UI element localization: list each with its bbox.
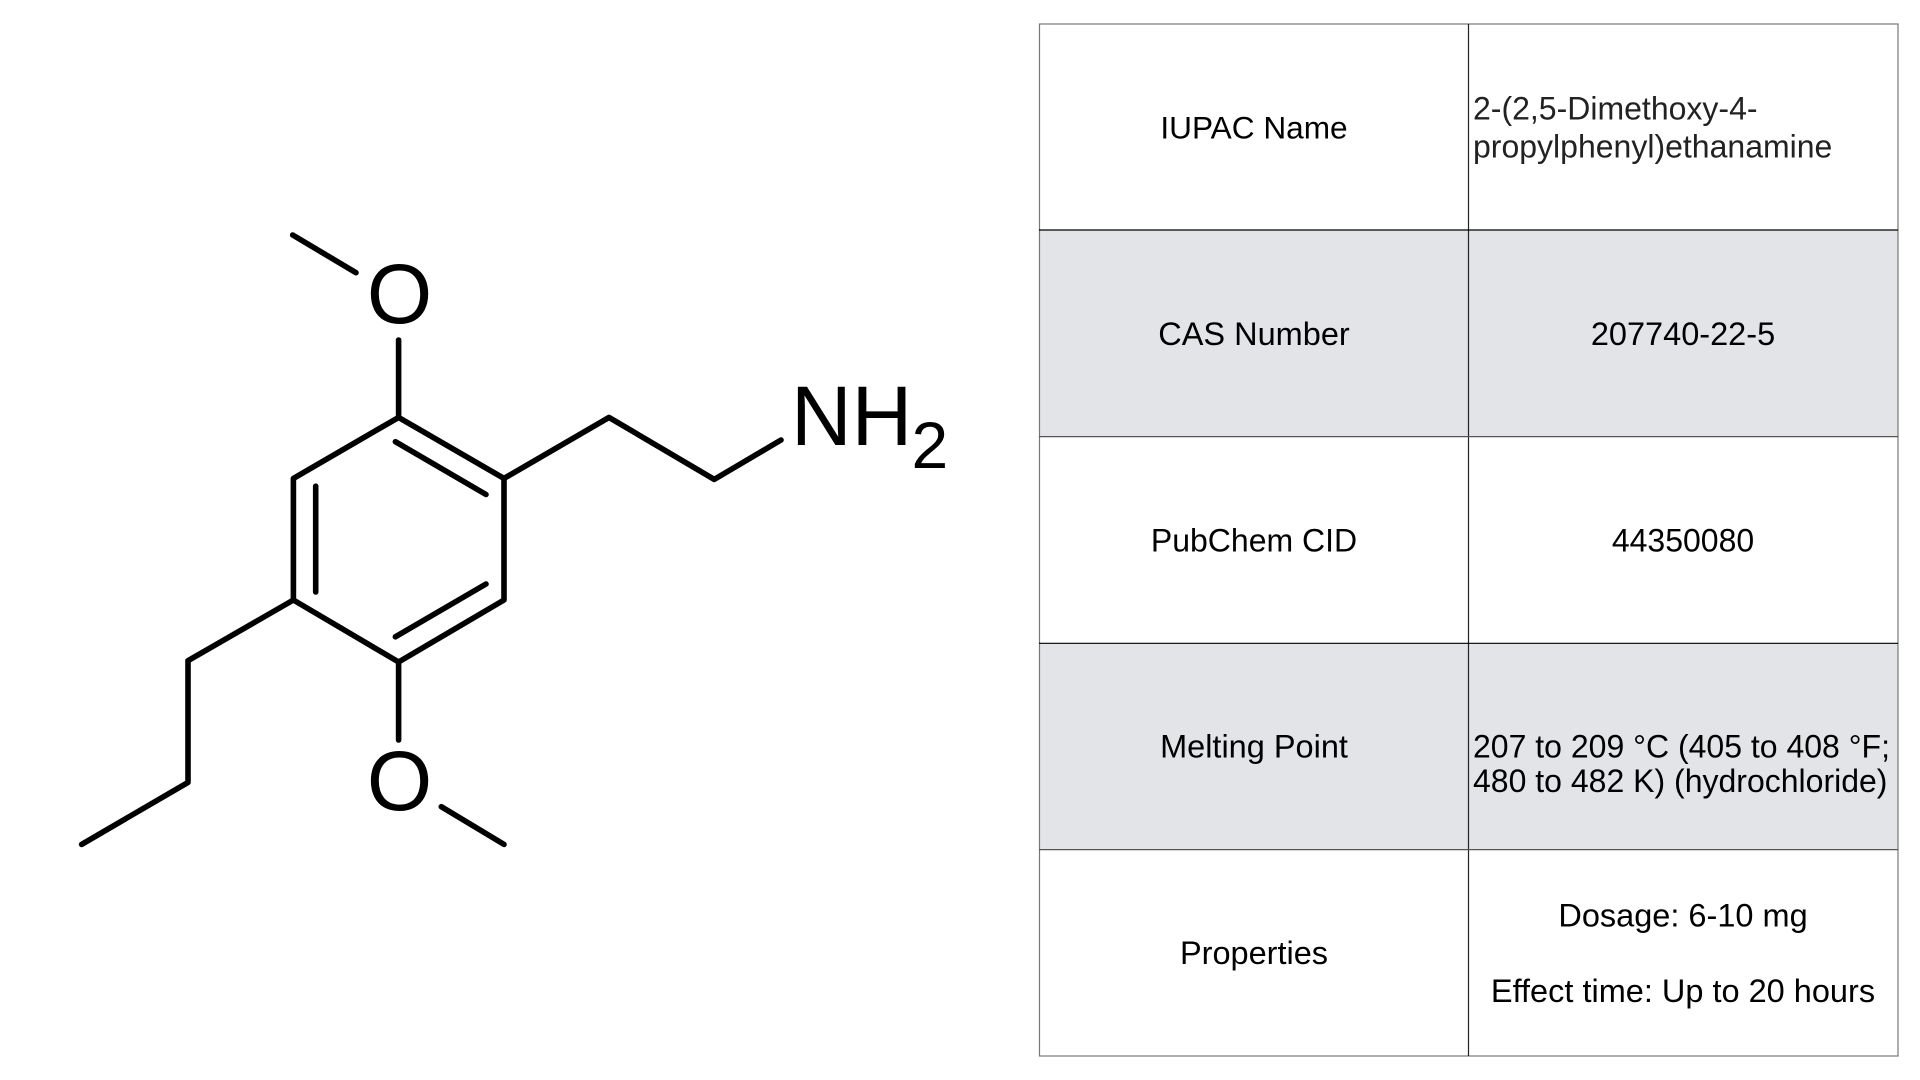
propyl chain: [82, 600, 293, 844]
row: IUPAC Name: 2-(2,5-Dimethoxy-4-: [1473, 90, 1758, 126]
row: PubChem CID: 44350080: [1612, 522, 1754, 558]
row: Properties: Dosage: 6-10 mg: [1558, 898, 1808, 934]
row: IUPAC Name: IUPAC Name: [1160, 110, 1348, 146]
row: CAS Number: [1039, 230, 1898, 437]
row: IUPAC Name: [1039, 24, 1898, 230]
row: CAS Number: CAS Number: [1158, 316, 1350, 352]
row: Properties: Properties: [1180, 935, 1328, 971]
row: Melting Point: 207 to 209 °C (405 to 408 °F;: [1473, 728, 1890, 764]
top methoxy group: [293, 235, 432, 417]
row: IUPAC Name: propylphenyl)ethanamine: [1473, 128, 1832, 164]
bottom methoxy group: O: [367, 734, 432, 828]
row: PubChem CID: PubChem CID: [1151, 522, 1357, 558]
properties table: [1039, 24, 1898, 1056]
row: Properties: Effect time: Up to 20 hours: [1491, 973, 1875, 1009]
ethylamine chain: [504, 417, 781, 479]
amine label NH2: NH: [791, 369, 912, 463]
row: Melting Point: [1039, 643, 1898, 850]
bottom methoxy group: [367, 662, 504, 844]
row: Melting Point: Melting Point: [1160, 728, 1348, 764]
molecule structure diagram: [82, 235, 948, 844]
benzene ring: [293, 417, 504, 662]
top methoxy group: O: [367, 247, 432, 341]
row: Melting Point: 480 to 482 K) (hydrochloride): [1473, 763, 1887, 799]
amine label NH2: 2: [912, 408, 948, 482]
row: Properties: [1039, 850, 1898, 1056]
row: PubChem CID: [1039, 437, 1898, 643]
amine label NH2: [791, 369, 948, 482]
row: CAS Number: 207740-22-5: [1591, 316, 1775, 352]
